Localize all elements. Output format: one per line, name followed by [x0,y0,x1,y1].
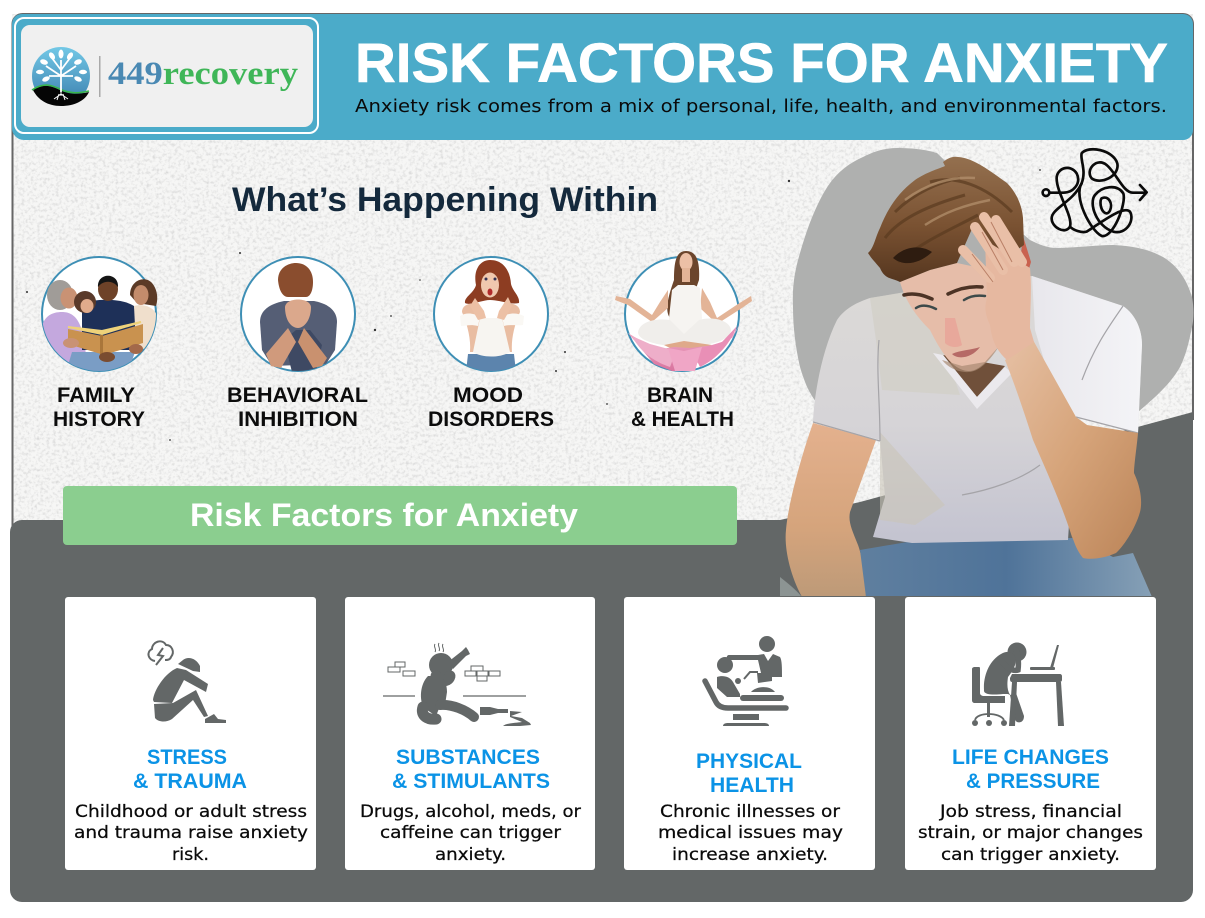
heading [133,746,247,793]
label: family history: FAMILY [57,384,135,407]
neck [943,355,1005,397]
label: brain and health: & HEALTH [631,408,734,431]
icon: family history [40,257,158,372]
paper background panel [12,14,1193,534]
heading: & PRESSURE [966,770,1100,793]
hair [868,157,1024,282]
dark lower panel [10,412,1193,902]
logo wordmark: 449recovery [108,56,299,92]
jeans [860,538,1152,597]
body text: Job stress, financial [939,802,1122,822]
shirt body [813,276,1142,543]
main title: RISK FACTORS FOR ANXIETY [355,31,1168,94]
logo box [15,18,318,133]
label: family history: HISTORY [53,408,145,431]
body text: anxiety. [435,845,506,865]
frame outline [12,14,1193,530]
face [900,263,1002,371]
card: life changes and pressure [905,597,1156,870]
card: stress and trauma [65,597,316,870]
label: mood disorders: MOOD [453,384,523,407]
ear [1021,238,1031,268]
icon: tangled scribble [1043,149,1147,236]
body text: medical issues may [658,823,843,843]
icon: sitting person with storm cloud [148,641,226,723]
body text [918,802,1143,865]
label: behavioral inhibition: BEHAVIORAL [227,384,368,407]
icon: mood disorders [434,257,548,372]
banner: risk factors for anxiety [63,486,737,545]
body text: and trauma raise anxiety [74,823,308,843]
icon: patient and doctor [705,636,786,726]
body text: risk. [172,845,209,865]
label: mood disorders: DISORDERS [428,408,554,431]
body text [74,802,308,865]
heading: SUBSTANCES [396,746,540,769]
heading [696,750,802,797]
label: brain and health [631,384,734,431]
body text: Drugs, alcohol, meds, or [360,802,581,822]
heading [392,746,550,793]
card: physical health [624,597,875,870]
heading [952,746,1109,793]
label: behavioral inhibition [227,384,368,431]
body text: increase anxiety. [672,845,828,865]
body text: can trigger anxiety. [941,845,1120,865]
subtitle: Anxiety risk comes from a mix of personal, life, health, and environmental factors. [355,96,1167,117]
label: behavioral inhibition: INHIBITION [238,408,358,431]
header band [12,14,1193,140]
icon: behavioral inhibition [241,257,355,372]
label: brain and health: BRAIN [647,384,713,407]
banner: risk factors for anxiety: Risk Factors for Anxiety [190,497,578,533]
hand [985,240,1034,360]
heading: HEALTH [710,774,794,797]
section heading: what's happening within: What’s Happening Within [232,181,658,219]
icon: person drinking [383,643,531,726]
label: mood disorders [428,384,554,431]
icon: person slumped at desk [972,642,1064,726]
right arm and elbow [1005,340,1141,559]
label: family history [53,384,145,431]
heading: & STIMULANTS [392,770,550,793]
heading: & TRAUMA [133,770,247,793]
man holding head [780,157,1152,597]
heading: STRESS [147,746,227,769]
body text: caffeine can trigger [380,823,561,843]
icon: brain and health [615,251,752,371]
heading: LIFE CHANGES [952,746,1109,769]
body text [360,802,581,865]
body text: Chronic illnesses or [660,802,840,822]
card: substances and stimulants [345,597,595,870]
body text: Childhood or adult stress [75,802,307,822]
logo emblem: tree [32,47,90,106]
body text: strain, or major changes [918,823,1143,843]
grey blob behind man [793,148,1194,412]
left arm [786,423,876,597]
body text [658,802,843,865]
heading: PHYSICAL [696,750,802,773]
